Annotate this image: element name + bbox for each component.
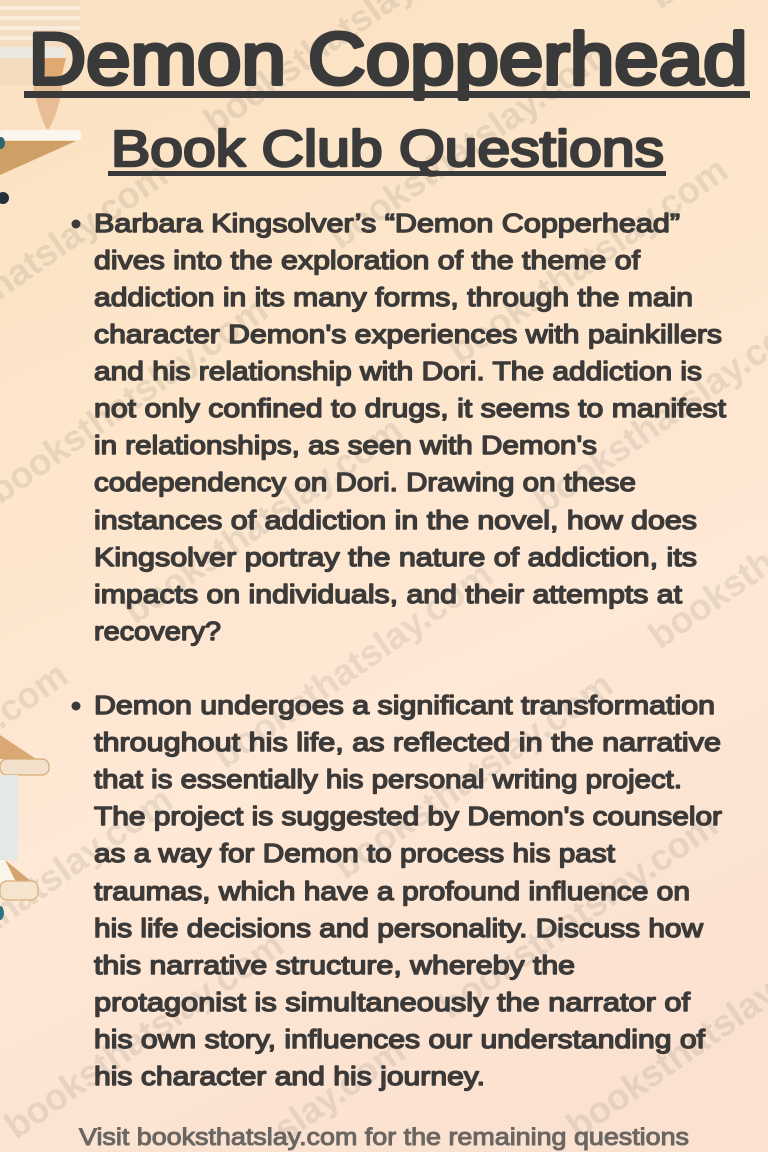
watermarks: booksthatslay.com: [206, 554, 500, 777]
question 1 text: in relationships, as seen with Demon's: [94, 430, 597, 460]
question 1 text: Kingsolver portray the nature of addiction, its: [94, 542, 697, 572]
question 1 text: not only confined to drugs, it seems to manifest: [94, 393, 727, 423]
question 2 text: throughout his life, as reflected in the narrative: [94, 727, 721, 757]
question 1 text: recovery?: [94, 616, 221, 646]
question 2 text: [94, 690, 722, 1091]
question 2 text: that is essentially his personal writing project.: [94, 764, 682, 794]
question 1 text: Barbara Kingsolver’s “Demon Copperhead”: [94, 208, 680, 238]
watermarks: booksthatslay.com: [116, 409, 410, 632]
subtitle: Book Club Questions: [111, 120, 664, 177]
bullet 1: [72, 220, 80, 228]
question 1: [72, 208, 727, 646]
question 2 text: his own story, influences our understanding of: [94, 1024, 706, 1054]
question 1 text: instances of addiction in the novel, how does: [94, 505, 697, 535]
question 2 text: as a way for Demon to process his past: [94, 838, 616, 868]
question 1 text: impacts on individuals, and their attempts at: [94, 579, 683, 609]
question 2 text: his life decisions and personality. Discuss how: [94, 913, 703, 943]
question 2 text: Demon undergoes a significant transformation: [94, 690, 715, 720]
decoration: upper left shelves: [0, 0, 81, 204]
question 2: [72, 690, 722, 1091]
question 1 text: [94, 208, 727, 646]
question 1 text: and his relationship with Dori. The addiction is: [94, 356, 702, 386]
watermarks: booksthatslay.com: [0, 924, 291, 1147]
question 2 text: his character and his journey.: [94, 1061, 485, 1091]
decoration: lower left shelves: [0, 735, 49, 920]
question 1 text: addiction in its many forms, through the main: [94, 282, 693, 312]
watermarks: slay.com: [266, 1030, 412, 1150]
watermarks: booksthatslay.com: [321, 34, 615, 257]
question 2 text: traumas, which have a profound influence on: [94, 876, 690, 906]
question 1 text: character Demon's experiences with painkillers: [94, 319, 722, 349]
watermarks: booksthatslay.com: [326, 664, 620, 887]
watermarks: booksthatslay.com: [431, 804, 725, 1027]
bullet 2: [72, 702, 80, 710]
footer: Visit booksthatslay.com for the remaining questions: [79, 1124, 689, 1151]
watermarks: booksthatslay.com: [441, 149, 735, 372]
question 2 text: this narrative structure, whereby the: [94, 950, 575, 980]
question 1 text: codependency on Dori. Drawing on these: [94, 467, 636, 497]
question 2 text: The project is suggested by Demon's counselor: [94, 801, 722, 831]
question 2 text: protagonist is simultaneously the narrator of: [94, 987, 691, 1017]
question 1 text: dives into the exploration of the theme of: [94, 245, 641, 275]
title: Demon Copperhead: [28, 19, 748, 100]
